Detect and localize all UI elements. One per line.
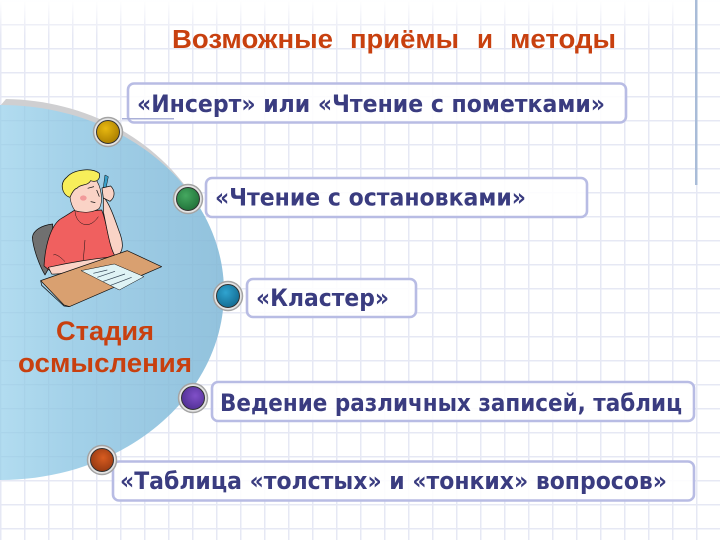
stage label: Стадия bbox=[56, 316, 154, 346]
method 5 bbox=[88, 446, 694, 500]
label: «Инсерт» или «Чтение с пометками» bbox=[137, 90, 605, 118]
box bbox=[212, 382, 694, 421]
box bbox=[128, 84, 626, 122]
hand bbox=[102, 186, 114, 201]
pen bbox=[103, 175, 108, 188]
lower arm bbox=[48, 257, 115, 274]
blue margin line bbox=[695, 0, 698, 185]
box bbox=[247, 279, 416, 317]
box bbox=[113, 462, 694, 500]
box accent line bbox=[122, 118, 174, 120]
bullet: yellow bbox=[94, 118, 122, 146]
bullet: blue bbox=[214, 282, 242, 310]
title: приёмы bbox=[350, 26, 459, 54]
method 3 bbox=[214, 279, 416, 317]
illustration: student at desk bbox=[32, 170, 162, 307]
title: и bbox=[477, 26, 493, 54]
label: «Чтение с остановками» bbox=[215, 184, 526, 212]
stage label bbox=[18, 316, 192, 378]
stage label: осмысления bbox=[18, 348, 192, 378]
paper bbox=[81, 264, 144, 290]
label: «Кластер» bbox=[256, 284, 389, 312]
face bbox=[70, 177, 101, 212]
bullet: green bbox=[174, 184, 202, 214]
bullet: red-brown bbox=[88, 446, 116, 474]
box bbox=[206, 178, 587, 217]
label: «Таблица «толстых» и «тонких» вопросов» bbox=[120, 467, 667, 495]
panel: stage disc bbox=[0, 99, 224, 480]
hair bbox=[62, 170, 100, 197]
title: Возможные bbox=[172, 26, 333, 54]
title: методы bbox=[510, 26, 616, 54]
disc shadow bbox=[0, 99, 222, 270]
method 4 bbox=[178, 382, 694, 421]
bullet: purple bbox=[178, 384, 208, 412]
raised arm bbox=[103, 197, 122, 257]
title bbox=[172, 26, 616, 54]
chair bbox=[32, 224, 53, 275]
shirt bbox=[44, 210, 115, 273]
disc bbox=[0, 105, 224, 480]
desk bbox=[41, 251, 162, 307]
method 2 bbox=[174, 178, 587, 217]
method 1 bbox=[94, 84, 626, 146]
